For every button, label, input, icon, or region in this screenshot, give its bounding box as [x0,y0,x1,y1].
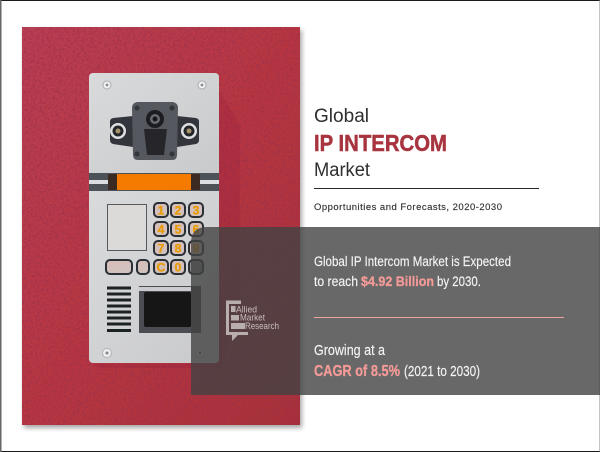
callout: market size [314,254,511,289]
function buttons [106,260,149,274]
logo wordmark: Market [240,312,265,322]
growth rate line two: CAGR of 8.5% [314,363,400,380]
logo wordmark [236,304,279,331]
logo wordmark: Research [245,321,279,331]
market size line one: Global IP Intercom Market is Expected [314,254,511,269]
keypad digits: 4 [158,222,165,236]
growth rate line two [314,363,480,380]
keypad [154,203,203,274]
callout divider [314,317,564,318]
keypad digits: 8 [175,242,182,256]
keypad digits: 6 [193,222,200,236]
keypad digits [157,204,200,274]
logo bars [231,306,245,329]
callout: growth rate [314,343,480,380]
intercom upper plate [89,73,219,173]
info window [108,204,146,250]
dark overlay panel [191,227,600,395]
red wall background [22,27,300,425]
intercom assembly [89,73,240,368]
market size line two: by 2030. [437,274,481,289]
growth rate line one: Growing at a [314,343,386,359]
keypad digits: 9 [193,242,200,256]
growth rate line two: (2021 to 2030) [404,364,480,380]
market size line two [314,273,481,289]
bottom screws [102,348,204,358]
keypad digits: 5 [175,222,182,236]
intercom plate shadow [92,90,240,368]
title: Global: Global [314,106,369,127]
keypad keys [154,203,203,274]
logo speech bubble [226,300,248,341]
market size line two: $4.92 Billion [361,273,434,289]
keypad digits: 1 [158,204,165,218]
title: Market: Market [314,160,371,181]
keypad digits: 2 [175,204,182,218]
market size line two: to reach [314,274,358,289]
keypad digits: 3 [193,204,200,218]
top screws [103,81,206,89]
camera module [110,102,199,160]
photo: intercom on red wall [22,27,300,425]
keypad digits: C [157,260,166,274]
intercom lower plate [89,191,219,363]
title rule [314,188,539,189]
keypad digits: 0 [175,260,182,274]
card reader [139,286,201,333]
keypad digits: 7 [158,242,165,256]
subtitle: Opportunities and Forecasts, 2020-2030 [314,202,502,213]
display strip [89,173,219,191]
speaker grille [107,286,131,332]
title: IP INTERCOM: IP INTERCOM [314,130,447,156]
wall texture [22,27,300,425]
logo: Allied Market Research [226,300,279,341]
logo wordmark: Allied [236,304,257,314]
